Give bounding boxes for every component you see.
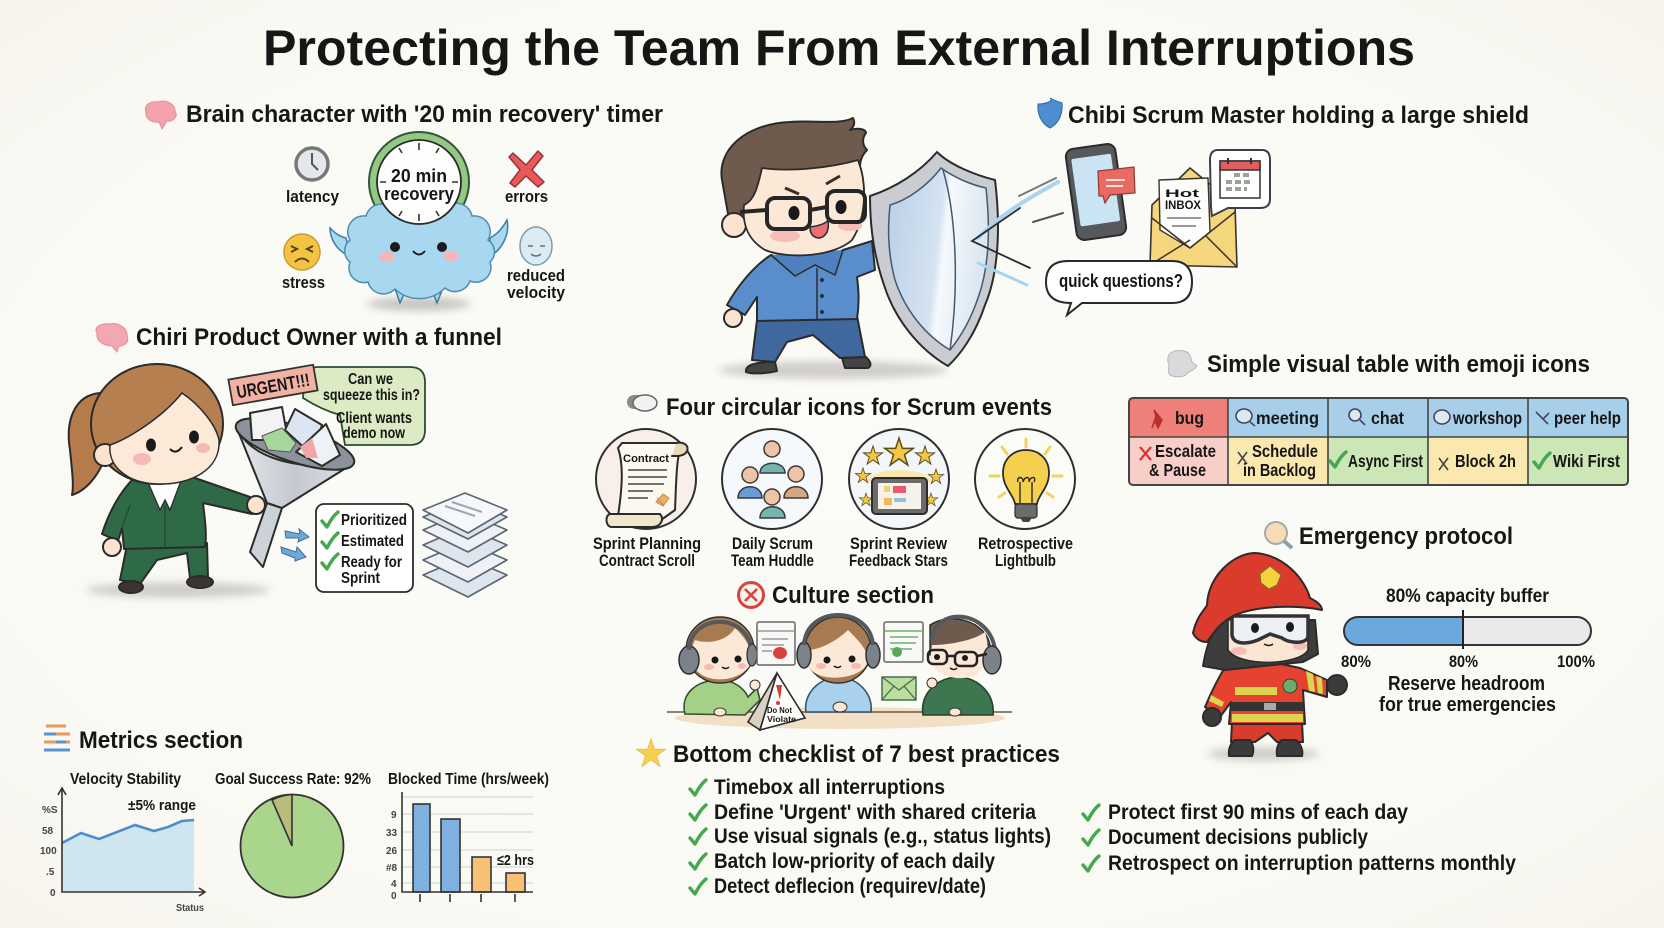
icon: calendar card xyxy=(1210,150,1270,216)
callout: client request bubble: Client wants xyxy=(336,410,412,427)
person: left teammate xyxy=(679,617,760,716)
person: middle teammate xyxy=(797,615,880,712)
chart: goal success pie xyxy=(215,771,371,898)
chart: goal success pie: Goal Success Rate: 92% xyxy=(215,771,371,788)
chart: velocity stability: Status xyxy=(176,903,204,914)
icon: sprint planning scroll xyxy=(596,429,696,529)
arrows: deflected interruptions xyxy=(972,178,1063,285)
chart: blocked time bars: ≤2 hrs xyxy=(497,852,534,869)
checklist: left column: Timebox all interruptions xyxy=(714,776,945,799)
chart: capacity buffer bar: 80% xyxy=(1449,652,1478,671)
chart: capacity buffer bar xyxy=(1341,586,1595,671)
chart: velocity stability: ±5% range xyxy=(128,797,196,814)
callout: client request bubble: squeeze this in? xyxy=(323,387,420,404)
icon: clock latency: latency xyxy=(286,187,339,206)
labels: scrum events: Sprint Planning xyxy=(593,534,701,553)
panel: scrum events xyxy=(593,394,1075,570)
labels: scrum events: Retrospective xyxy=(978,534,1073,553)
panel: interruption table xyxy=(1129,350,1628,485)
text: reserve headroom xyxy=(1379,673,1556,716)
icon: sprint planning scroll: Contract xyxy=(623,453,669,465)
icon: envelope xyxy=(1150,168,1237,267)
checklist: left column: Define 'Urgent' with shared criteria xyxy=(714,801,1036,824)
checklist: left column: Use visual signals (e.g., status lights) xyxy=(714,825,1051,848)
icon: do not violate tent sign xyxy=(748,673,805,730)
table: interruption types: Async First xyxy=(1348,451,1423,471)
icon: red x errors: errors xyxy=(505,187,548,206)
chart: velocity stability: 100 xyxy=(40,846,57,857)
heading: four circular icons: Four circular icons for Scrum events xyxy=(666,394,1052,421)
icon: reduced velocity face xyxy=(507,227,565,302)
table: interruption types: workshop xyxy=(1452,408,1522,428)
chart: velocity stability: %S xyxy=(42,805,58,816)
icon: daily scrum huddle xyxy=(722,429,822,529)
heading: brain character: Brain character with '20 min recovery' timer xyxy=(186,101,663,128)
chart: velocity stability xyxy=(40,771,205,914)
icon: document with red mark xyxy=(757,622,795,665)
icon: reduced velocity face: reduced xyxy=(507,266,565,285)
panel: scrum master shield xyxy=(718,98,1529,379)
labels: scrum events xyxy=(593,534,1073,570)
panel: culture xyxy=(667,582,1012,730)
icon: brain character with timer xyxy=(330,132,508,311)
callout: quick questions xyxy=(1046,261,1192,315)
character: firefighter xyxy=(1193,553,1347,761)
checklist: ready for sprint xyxy=(316,504,413,592)
checklist: ready for sprint: Sprint xyxy=(341,570,380,587)
icon: green envelope xyxy=(882,677,916,700)
icon: brain character with timer: recovery xyxy=(384,184,454,204)
icon: do not violate tent sign: Do Not xyxy=(767,706,792,715)
icon: stressed face: stress xyxy=(282,273,325,292)
icon: reduced velocity face: velocity xyxy=(507,283,565,302)
heading: bottom checklist: Bottom checklist of 7 best practices xyxy=(673,741,1060,768)
table: interruption types xyxy=(1129,398,1628,485)
icon: funnel with tasks xyxy=(230,407,360,567)
table: interruption types: bug xyxy=(1175,408,1204,428)
icon: large shield xyxy=(870,152,998,366)
callout: client request bubble xyxy=(303,367,425,445)
text: reserve headroom: for true emergencies xyxy=(1379,694,1556,716)
chart: capacity buffer bar: 80% xyxy=(1341,652,1371,671)
icon: retrospective lightbulb xyxy=(975,429,1075,529)
chart: blocked time bars: Blocked Time (hrs/week) xyxy=(388,771,549,788)
icon: phone xyxy=(1065,143,1135,241)
chart: blocked time bars: 33 xyxy=(386,828,398,839)
table: interruption types: & Pause xyxy=(1149,460,1206,480)
arrows: funnel to checklist xyxy=(281,529,309,561)
tag: urgent: URGENT!!! xyxy=(235,370,311,402)
labels: scrum events: Daily Scrum xyxy=(732,534,813,553)
callout: client request bubble: demo now xyxy=(343,425,406,442)
table: interruption types: Block 2h xyxy=(1455,451,1516,471)
callout: client request bubble: Can we xyxy=(348,371,393,388)
icon: envelope: Hot xyxy=(1165,188,1200,200)
icon: sprint review stars xyxy=(849,429,949,529)
checklist: right column: Retrospect on interruption patterns monthly xyxy=(1108,852,1516,875)
icon: document with green mark xyxy=(884,622,923,662)
checklist: left column: Detect deflecion (requirev/date) xyxy=(714,875,986,898)
checklist: right column: Protect first 90 mins of each day xyxy=(1108,801,1408,824)
heading: scrum master: Chibi Scrum Master holding a large shield xyxy=(1068,102,1529,129)
icon: clock latency xyxy=(286,148,339,206)
chart: velocity stability: 58 xyxy=(42,826,54,837)
labels: scrum events: Feedback Stars xyxy=(849,551,948,570)
chart: capacity buffer bar: 80% capacity buffer xyxy=(1386,586,1550,607)
checklist: left column xyxy=(690,776,1051,898)
table: interruption types: meeting xyxy=(1256,408,1319,428)
illustration: team with headphones xyxy=(667,615,1012,730)
table: interruption types: in Backlog xyxy=(1243,460,1316,480)
title: Protecting the Team From External Interruptions xyxy=(263,20,1415,76)
chart: capacity buffer bar: 100% xyxy=(1557,652,1595,671)
person: right teammate xyxy=(923,617,1001,716)
labels: scrum events: Contract Scroll xyxy=(599,551,695,570)
chart: velocity stability: Velocity Stability xyxy=(70,771,181,788)
checklist: right column: Document decisions publicly xyxy=(1108,826,1368,849)
icon: brain character with timer: 20 min xyxy=(391,166,447,186)
chart: blocked time bars: 26 xyxy=(386,846,398,857)
icon: stressed face xyxy=(282,234,325,292)
callout: quick questions: quick questions? xyxy=(1059,271,1183,291)
heading: metrics section: Metrics section xyxy=(79,727,243,754)
checklist: ready for sprint: Prioritized xyxy=(341,512,407,529)
table: interruption types: Schedule xyxy=(1252,441,1318,461)
chart: velocity stability: 0 xyxy=(50,888,56,899)
chart: velocity stability: .5 xyxy=(46,867,55,878)
panel: product owner funnel xyxy=(69,324,507,598)
heading: emergency protocol: Emergency protocol xyxy=(1299,523,1513,550)
panel: metrics xyxy=(40,726,549,914)
checklist: ready for sprint: Ready for xyxy=(341,554,402,571)
chart: blocked time bars: #8 xyxy=(386,863,398,874)
table: interruption types: chat xyxy=(1371,408,1404,428)
heading: simple visual table: Simple visual table with emoji icons xyxy=(1207,351,1590,378)
panel: best practices checklist xyxy=(636,738,1516,898)
icon: envelope: INBOX xyxy=(1165,198,1201,212)
icon: red x errors xyxy=(505,151,548,206)
chart: blocked time bars: 9 xyxy=(391,810,397,821)
checklist: ready for sprint: Estimated xyxy=(341,533,404,550)
table: interruption types: Wiki First xyxy=(1553,451,1620,471)
labels: scrum events: Lightbulb xyxy=(995,551,1056,570)
panel: emergency protocol xyxy=(1193,522,1595,761)
table: interruption types: Escalate xyxy=(1155,441,1216,461)
character: product owner xyxy=(69,364,270,598)
table: interruption types: peer help xyxy=(1554,408,1621,428)
labels: scrum events: Team Huddle xyxy=(731,551,814,570)
heading: culture section: Culture section xyxy=(772,582,934,609)
panel: brain recovery xyxy=(145,101,663,311)
character: scrum master xyxy=(718,118,948,379)
chart: blocked time bars xyxy=(386,771,549,902)
checklist: right column xyxy=(1083,801,1516,875)
checklist: left column: Batch low-priority of each daily xyxy=(714,850,995,873)
heading: product owner: Chiri Product Owner with a funnel xyxy=(136,324,502,351)
icon: do not violate tent sign: Violate xyxy=(767,715,797,724)
chart: blocked time bars: 0 xyxy=(391,891,397,902)
icon: paper stack xyxy=(423,493,507,597)
chart: blocked time bars: 4 xyxy=(391,879,397,890)
labels: scrum events: Sprint Review xyxy=(850,534,948,553)
text: reserve headroom: Reserve headroom xyxy=(1388,673,1545,695)
